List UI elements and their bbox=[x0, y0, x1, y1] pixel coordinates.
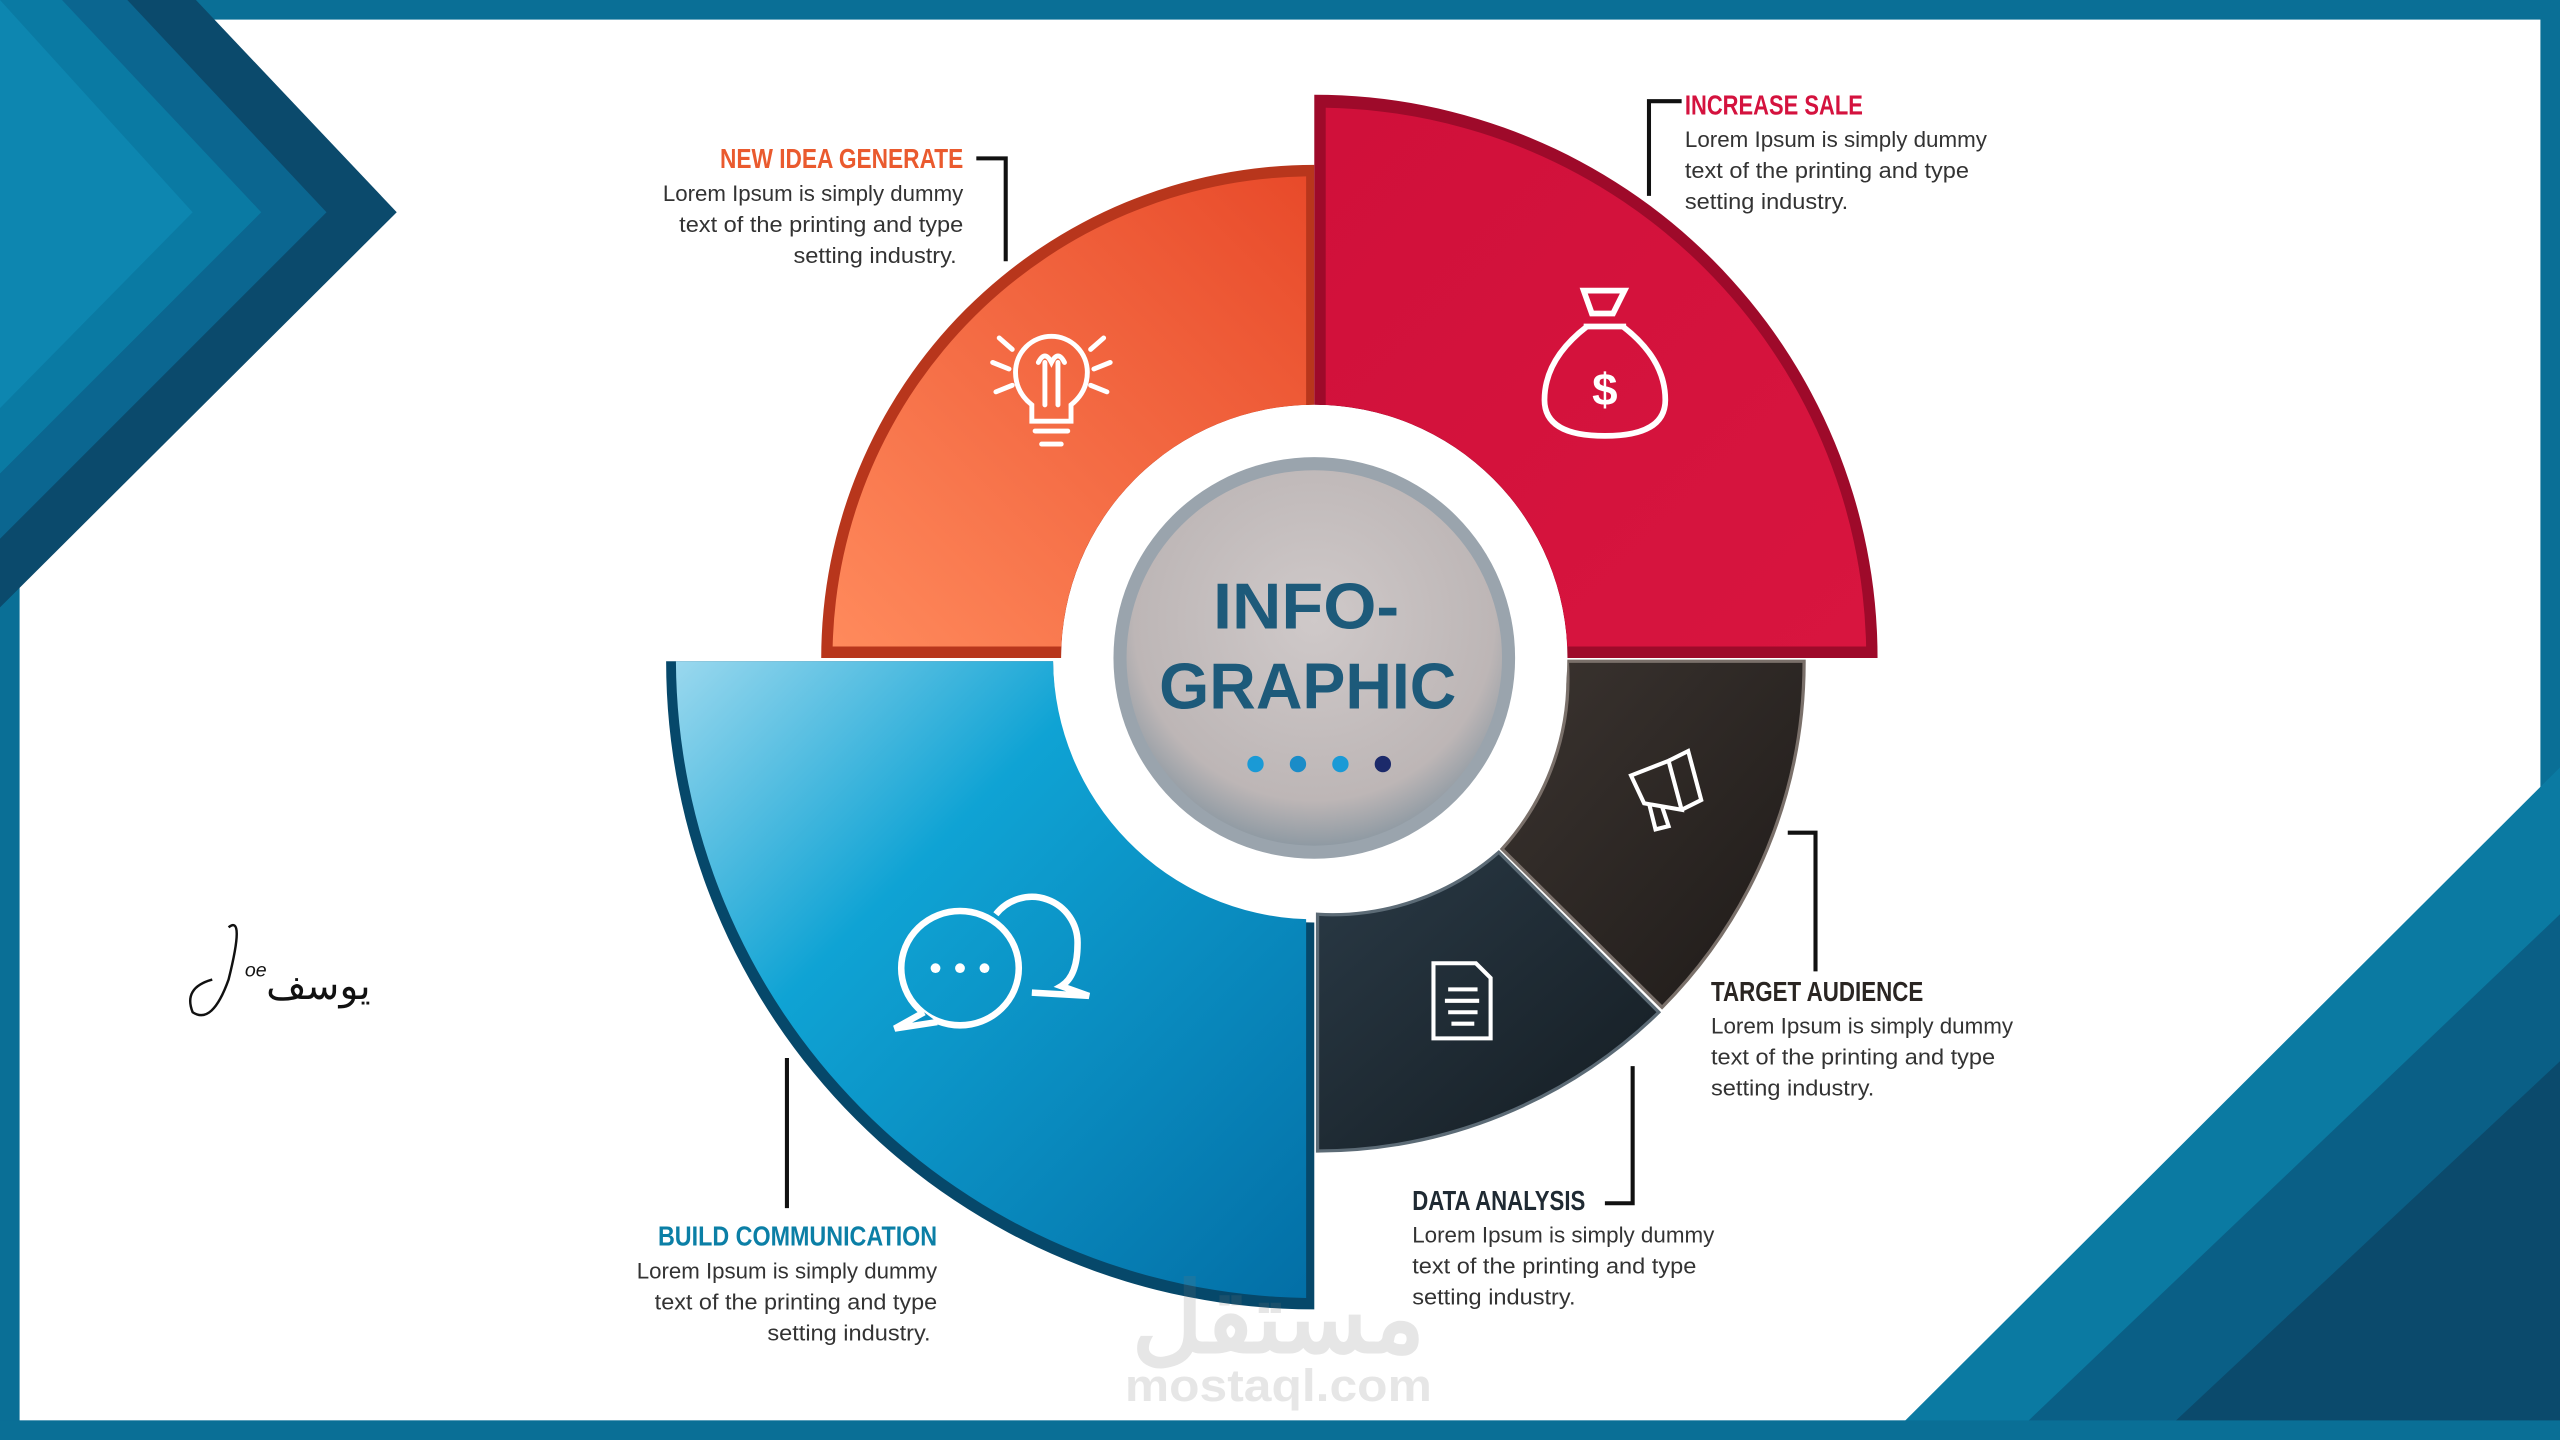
watermark: mostaql.com bbox=[1125, 1360, 1432, 1411]
label: build communication: text of the printing and type bbox=[655, 1289, 937, 1314]
label: new idea generate: setting industry. bbox=[793, 243, 957, 268]
center circle: INFO- bbox=[1213, 570, 1399, 643]
icon: money bag bbox=[1544, 291, 1665, 436]
label: build communication: BUILD COMMUNICATION bbox=[658, 1221, 937, 1252]
label: new idea generate bbox=[663, 143, 1006, 268]
label: data analysis: setting industry. bbox=[1412, 1284, 1576, 1309]
segment: red increase sale bbox=[1314, 95, 1878, 658]
signature: oe bbox=[245, 959, 267, 981]
label: new idea generate: NEW IDEA GENERATE bbox=[720, 143, 963, 174]
watermark: مستقل bbox=[1132, 1263, 1425, 1373]
label: data analysis: text of the printing and type bbox=[1412, 1253, 1696, 1278]
label: target audience bbox=[1711, 833, 2013, 1101]
label: data analysis bbox=[1412, 1066, 1714, 1309]
label: increase sale: Lorem Ipsum is simply dummy bbox=[1685, 127, 1987, 152]
segment: navy data analysis bbox=[1318, 852, 1659, 1151]
label: new idea generate: text of the printing and type bbox=[679, 212, 963, 237]
label: target audience: Lorem Ipsum is simply dummy bbox=[1711, 1013, 2013, 1038]
label: increase sale bbox=[1649, 89, 1987, 214]
label: data analysis: Lorem Ipsum is simply dummy bbox=[1412, 1222, 1714, 1247]
icon: document bbox=[1433, 963, 1491, 1038]
label: increase sale: setting industry. bbox=[1685, 189, 1848, 214]
label: build communication bbox=[637, 1058, 937, 1345]
icon: money bag: $ bbox=[1592, 364, 1618, 415]
signature: يوسف bbox=[266, 965, 371, 1009]
icon: light bulb bbox=[993, 336, 1110, 444]
center circle bbox=[1061, 405, 1567, 911]
label: target audience: setting industry. bbox=[1711, 1076, 1874, 1101]
label: increase sale: INCREASE SALE bbox=[1685, 89, 1863, 120]
segment: dark target audience bbox=[1502, 661, 1804, 1007]
label: target audience: TARGET AUDIENCE bbox=[1711, 976, 1923, 1007]
label: data analysis: DATA ANALYSIS bbox=[1412, 1185, 1585, 1216]
center circle: GRAPHIC bbox=[1159, 650, 1456, 723]
icon: chat bubbles bbox=[895, 897, 1089, 1029]
label: increase sale: text of the printing and type bbox=[1685, 158, 1969, 183]
segment: orange new idea bbox=[821, 165, 1314, 658]
label: build communication: Lorem Ipsum is simply dummy bbox=[637, 1258, 937, 1283]
label: build communication: setting industry. bbox=[767, 1320, 931, 1345]
icon: megaphone bbox=[1631, 751, 1701, 829]
segment: blue build communication bbox=[666, 661, 1314, 1309]
label: target audience: text of the printing and type bbox=[1711, 1044, 1995, 1069]
signature bbox=[190, 925, 371, 1015]
label: new idea generate: Lorem Ipsum is simply dummy bbox=[663, 181, 963, 206]
